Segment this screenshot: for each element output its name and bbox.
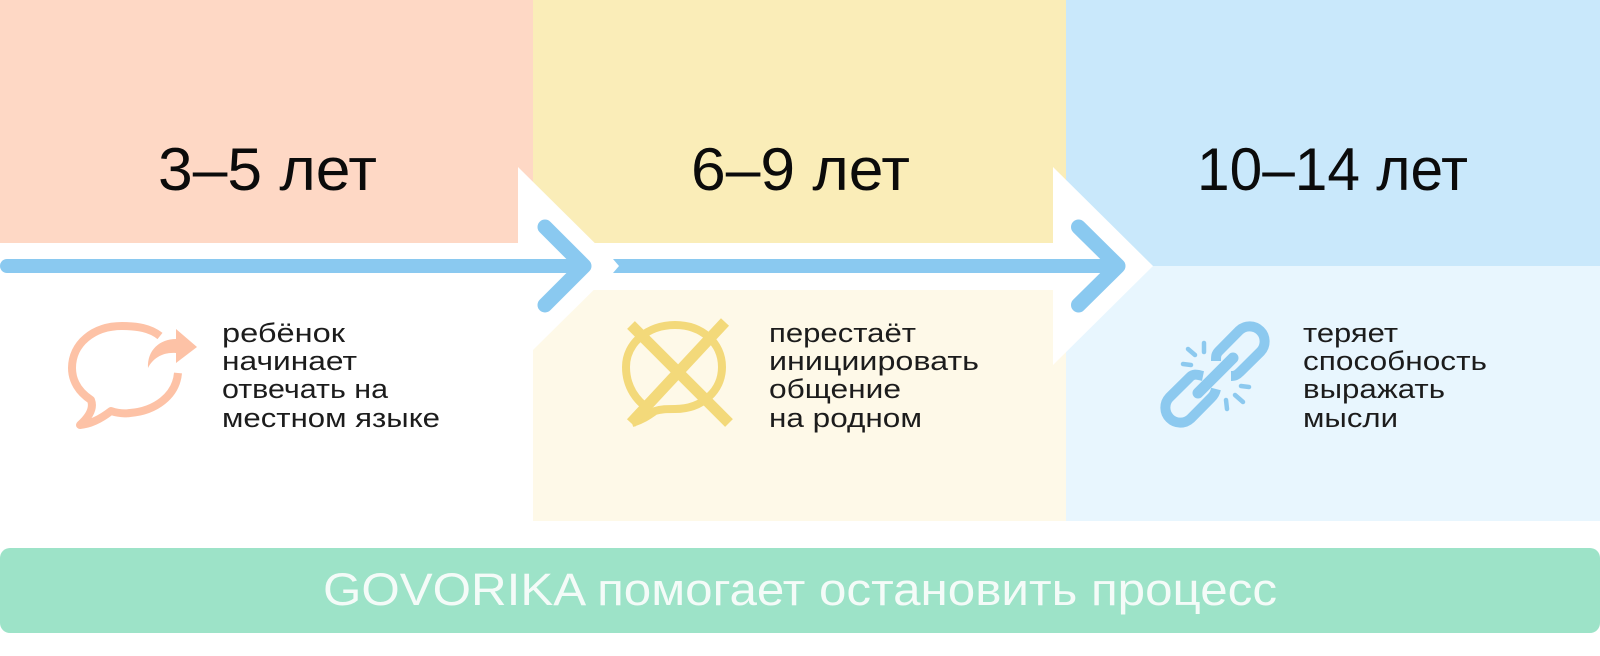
banner: GOVORIKA: GOVORIKA помогает остановить процесс: [323, 564, 1277, 615]
icon: crossed-out speech bubble: [626, 322, 729, 423]
text: third stage: способность: [1303, 346, 1487, 376]
panel: 10–14 years header: [1066, 0, 1600, 266]
text: third stage: выражать: [1303, 374, 1445, 404]
panel: 3–5 years header: [0, 0, 533, 243]
timeline arrow 1: [7, 227, 584, 305]
text: second stage: перестаёт: [769, 318, 916, 348]
panel: 10–14 years body: [1066, 266, 1600, 521]
heading: 3–5 лет: 3–5 лет: [158, 136, 377, 203]
icon: broken chain link: [1165, 326, 1265, 423]
panel: 6–9 years header: [533, 0, 1066, 243]
white arrow background 2: [1053, 167, 1153, 365]
text: first stage: отвечать на: [222, 374, 389, 404]
text: third stage: теряет: [1303, 318, 1398, 348]
white arrow background 1: [518, 167, 618, 350]
text: third stage: [1303, 318, 1487, 433]
text: second stage: [769, 318, 979, 433]
text: first stage: местном языке: [222, 403, 440, 433]
text: third stage: мысли: [1303, 403, 1398, 433]
text: second stage: инициировать: [769, 346, 979, 376]
text: first stage: [222, 318, 440, 433]
text: first stage: ребёнок: [222, 318, 345, 348]
text: first stage: начинает: [222, 346, 357, 376]
icon: speech bubble with reply arrow: [72, 326, 197, 425]
timeline arrow 2: [613, 227, 1118, 305]
panel: 6–9 years body: [533, 290, 1066, 521]
text: second stage: общение: [769, 374, 901, 404]
heading: 6–9 лет: 6–9 лет: [691, 136, 910, 203]
heading: 10–14 лет: 10–14 лет: [1197, 136, 1468, 203]
banner: GOVORIKA: [0, 548, 1600, 633]
text: second stage: на родном: [769, 403, 922, 433]
